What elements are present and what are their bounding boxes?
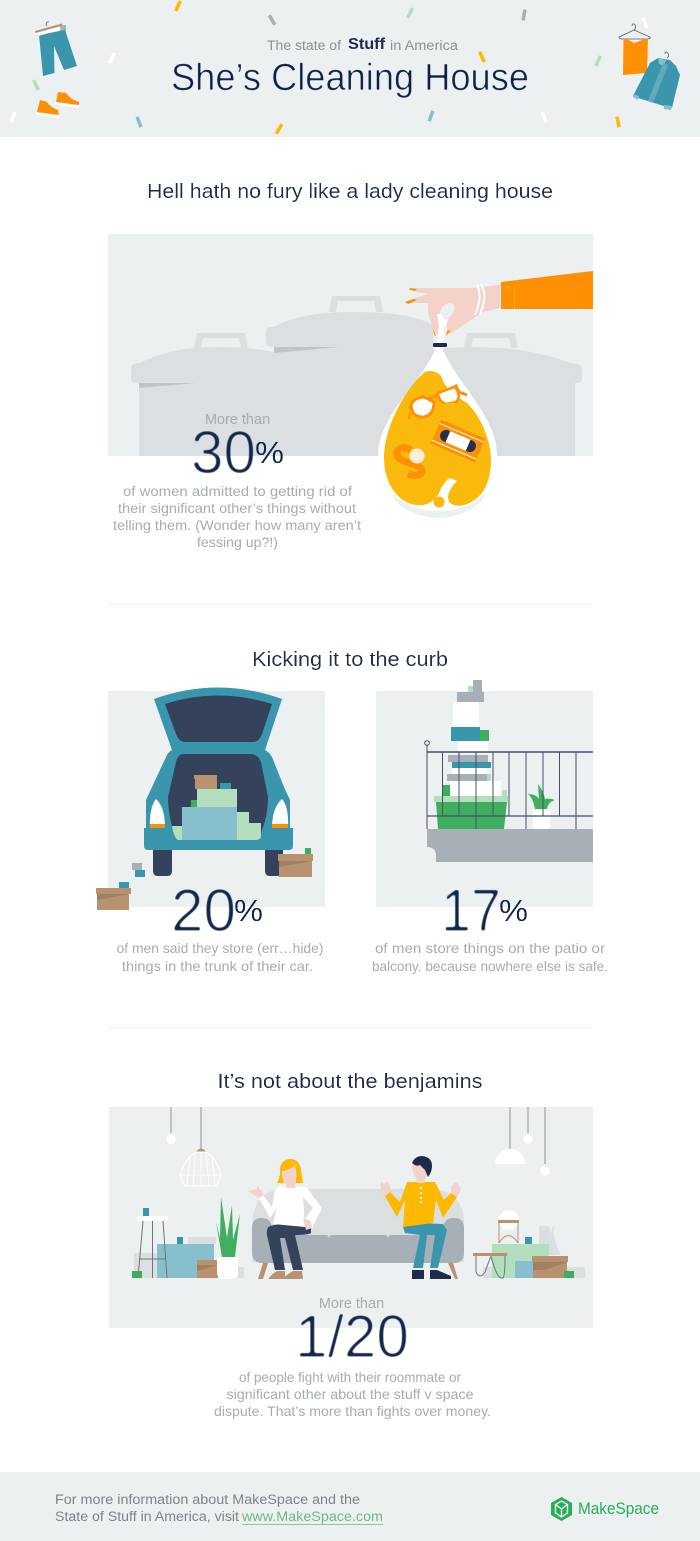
- balcony ledge: [427, 829, 593, 862]
- description: telling them. (Wonder how many aren’t: [113, 517, 361, 533]
- footer text: State of Stuff in America, visit: [55, 1509, 239, 1524]
- description: balcony. because nowhere else is safe.: [372, 958, 608, 974]
- woman on sofa: [248, 1159, 322, 1279]
- description: [113, 483, 361, 550]
- balcony railing: [425, 741, 593, 829]
- description: of women admitted to getting rid of: [123, 483, 352, 499]
- footer text: For more information about MakeSpace and the: [55, 1492, 360, 1507]
- heading: section 3: It’s not about the benjamins: [218, 1071, 482, 1093]
- footer text: www.MakeSpace.com: [241, 1509, 383, 1524]
- text block: 30 percent: [113, 412, 361, 550]
- label: more than: More than: [205, 412, 270, 428]
- furniture left: [132, 1197, 244, 1279]
- icon: hexagon: [551, 1497, 572, 1521]
- description: [372, 940, 608, 974]
- icon: orange sneakers: [36, 92, 79, 118]
- potted plant: [216, 1197, 240, 1279]
- percent sign: %: [234, 893, 263, 928]
- subtitle word: Stuff: Stuff: [348, 36, 386, 53]
- panel: living room illustration: [109, 1107, 593, 1328]
- panel: header: [0, 0, 700, 137]
- description: of men store things on the patio or: [375, 940, 605, 956]
- bag: [378, 347, 497, 518]
- confetti: [10, 0, 649, 135]
- woman's face: [282, 1165, 296, 1188]
- panel: trash cans illustration: [108, 234, 593, 456]
- icon: jeans on hanger: [35, 22, 77, 76]
- car: [144, 688, 293, 876]
- icon: denim shirt on hanger: [633, 52, 680, 110]
- text block: 1 in 20: [214, 1296, 491, 1419]
- title: She’s Cleaning House: [171, 57, 529, 99]
- subtitle start: The state of: [267, 38, 341, 53]
- icon: orange top on hanger: [619, 24, 650, 75]
- woman's torso and arms: [259, 1186, 322, 1228]
- man's hair: [412, 1156, 432, 1177]
- logo: [551, 1497, 659, 1521]
- subtitle end: in America: [390, 38, 459, 53]
- woman's legs: [267, 1224, 311, 1270]
- icon: hand holding trash bag: [378, 271, 593, 518]
- description: [116, 940, 324, 974]
- panel: footer: [0, 1472, 700, 1541]
- sleeve: [501, 271, 593, 309]
- description: significant other about the stuff v space: [226, 1386, 474, 1402]
- side table: [473, 1253, 507, 1278]
- man's legs: [403, 1223, 447, 1268]
- number: 20: 20: [171, 877, 236, 944]
- percent sign: %: [255, 435, 284, 470]
- boxes in trunk: [172, 775, 261, 840]
- man's torso and arms: [385, 1182, 457, 1227]
- description: [214, 1369, 491, 1419]
- percent sign: %: [499, 893, 528, 928]
- box: left: [96, 863, 145, 910]
- heading: section 1: Hell hath no fury like a lady cleaning house: [147, 181, 553, 203]
- description: things in the trunk of their car.: [122, 958, 313, 974]
- box: right: [278, 848, 313, 877]
- hand: [406, 285, 500, 334]
- logo: MakeSpace: [578, 1499, 659, 1518]
- trash cans: [131, 296, 582, 456]
- stacked items: [434, 680, 508, 829]
- furniture right: [473, 1210, 585, 1278]
- description: of men said they store (err…hide): [116, 940, 324, 956]
- description: fessing up?!): [197, 534, 278, 550]
- text block: 20 percent: [116, 877, 324, 974]
- trash contents: [384, 371, 491, 506]
- man on sofa: [380, 1156, 461, 1279]
- label: more than: More than: [319, 1296, 384, 1312]
- number: 17: 17: [441, 877, 501, 944]
- footer text: [55, 1492, 383, 1525]
- text block: 17 percent: [372, 877, 608, 974]
- hanging lamps left: [166, 1107, 221, 1186]
- description: dispute. That’s more than fights over money.: [214, 1403, 491, 1419]
- hanging lamps right: [495, 1107, 550, 1176]
- potted plant: [528, 784, 555, 829]
- description: their significant other’s things without: [118, 500, 356, 516]
- sofa: [252, 1189, 464, 1279]
- number: 1/20: 1/20: [295, 1303, 409, 1370]
- description: of people fight with their roommate or: [239, 1369, 461, 1385]
- number: 30: 30: [191, 419, 256, 486]
- panel: balcony illustration: [376, 680, 593, 907]
- icon: VHS tape: [431, 420, 485, 462]
- heading: section 2: Kicking it to the curb: [252, 649, 448, 671]
- bag neck: [437, 314, 449, 345]
- icon: watch: [397, 448, 424, 475]
- icon: glasses: [409, 386, 467, 419]
- panel: car trunk illustration: [96, 688, 325, 910]
- woman's hair: [277, 1159, 303, 1183]
